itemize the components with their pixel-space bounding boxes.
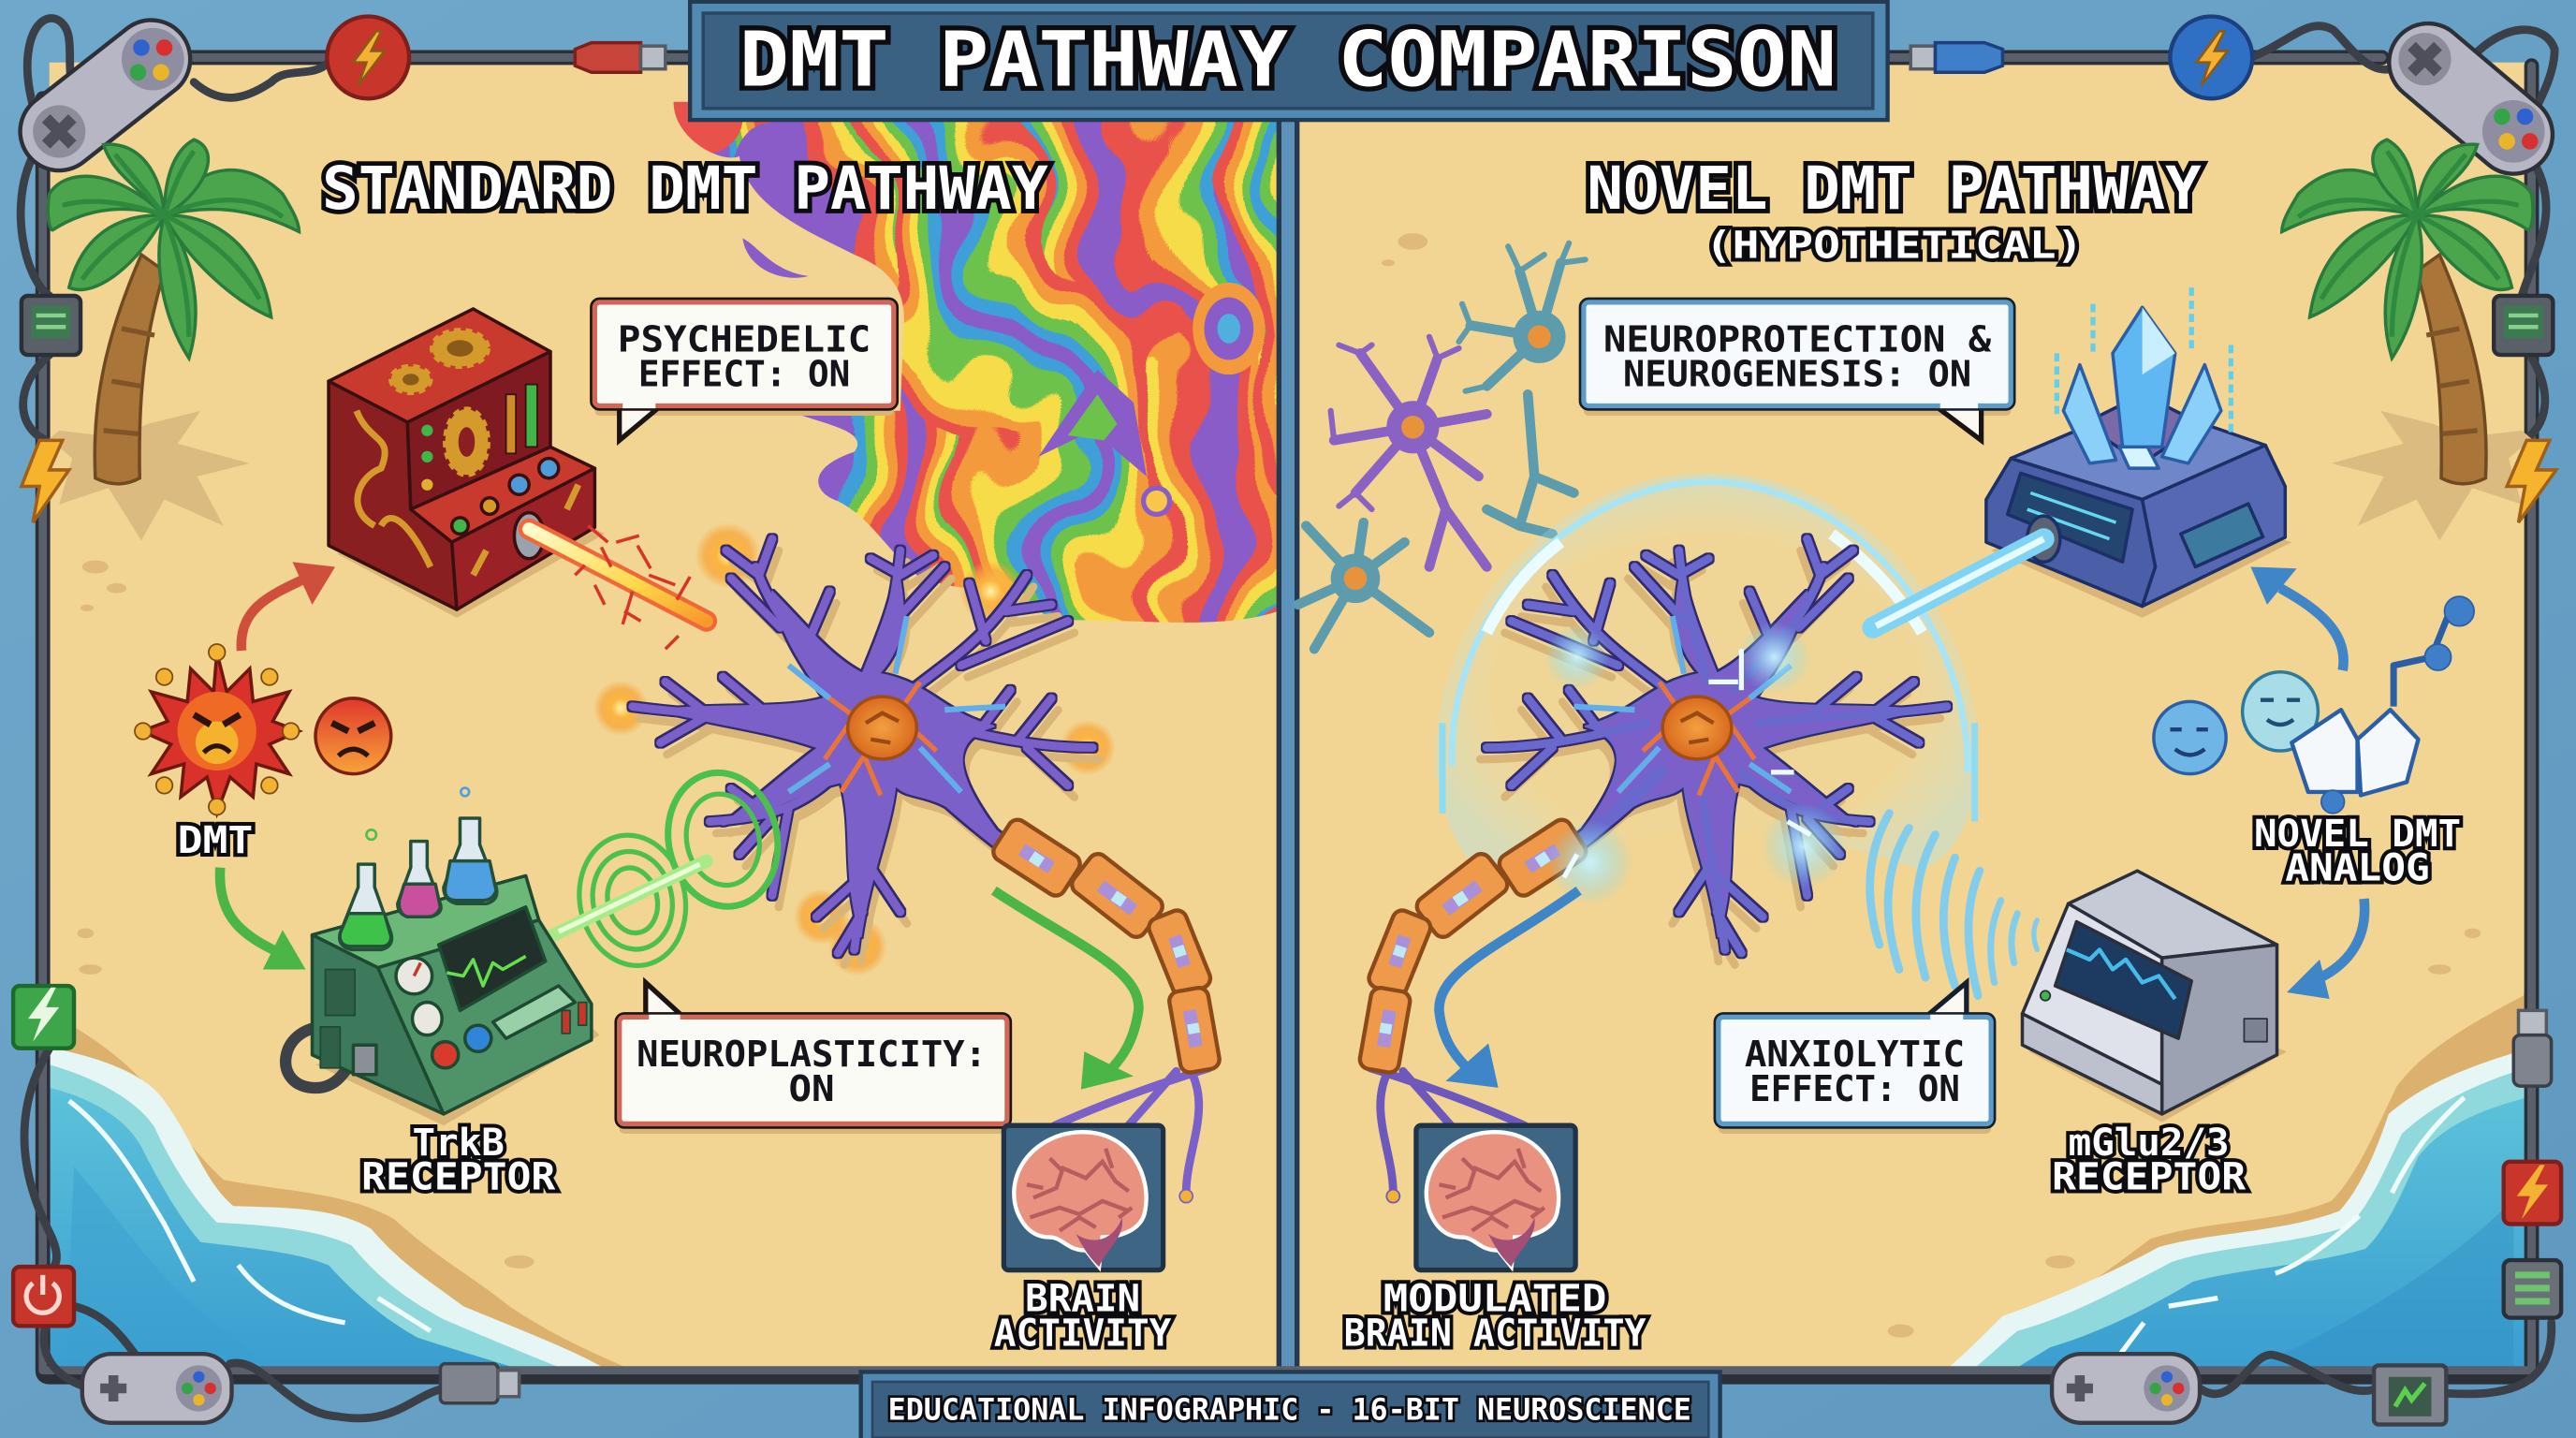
palm tree right — [2282, 139, 2533, 540]
heading: novel pathway: NOVEL DMT PATHWAY — [1587, 154, 2202, 223]
label: modulated brain activity: BRAIN ACTIVITY — [1344, 1311, 1647, 1355]
icon: red power bolt — [327, 17, 409, 98]
protective shield dome — [1436, 473, 1978, 871]
label: brain activity: BRAIN — [1025, 1277, 1140, 1321]
psychedelic rainbow swirl — [674, 101, 1277, 623]
callout: anxiolytic — [1719, 983, 1991, 1134]
icon: lightning left — [22, 440, 69, 522]
neuron left — [593, 522, 1221, 1203]
heading: standard pathway: STANDARD DMT PATHWAY — [322, 154, 1048, 223]
grey mglu monitor — [2022, 871, 2287, 1123]
ocean bottom right — [1945, 983, 2526, 1371]
palm tree left — [48, 139, 299, 540]
icon: usb right side — [2513, 1010, 2552, 1086]
novel dmt molecule — [2291, 596, 2474, 814]
controller bottom right — [2052, 1354, 2200, 1423]
callout: psychedelic effect — [594, 302, 894, 440]
label: modulated brain activity — [1344, 1277, 1647, 1355]
callout: neuroprotection: NEUROGENESIS: ON — [1623, 353, 1971, 395]
sand speckles — [78, 233, 2481, 1338]
subheading: hypothetical: (HYPOTHETICAL) — [1705, 224, 2083, 268]
callout: psychedelic effect: PSYCHEDELIC — [618, 319, 871, 361]
controller top left — [33, 28, 184, 157]
neuron right — [1358, 539, 1947, 1203]
arrow: red DMT to machine — [242, 562, 335, 651]
icon: blue usb plug — [1910, 43, 2002, 72]
arrow: green DMT to TrkB — [220, 868, 305, 969]
brain box left — [1003, 1125, 1164, 1270]
callout: neuroplasticity: ON — [788, 1068, 835, 1110]
label: brain activity: ACTIVITY — [994, 1311, 1172, 1355]
gears — [391, 330, 488, 475]
label: TrkB receptor: TrkB — [413, 1121, 505, 1165]
label: novel dmt analog: ANALOG — [2285, 846, 2430, 890]
icon: usb bottom — [440, 1364, 520, 1403]
footer banner — [861, 1372, 1720, 1438]
brain box right — [1416, 1125, 1575, 1270]
label: DMT: DMT — [178, 818, 253, 862]
arrow: blue to brain — [1439, 890, 1579, 1088]
callout: neuroprotection: NEUROPROTECTION & — [1603, 319, 1992, 361]
dmt virus — [135, 644, 299, 814]
callout: psychedelic effect: EFFECT: ON — [638, 353, 850, 395]
crystal machine — [1986, 287, 2291, 618]
title banner — [690, 2, 1888, 120]
teal smiling face — [2243, 672, 2318, 751]
label: mGlu2/3 receptor: mGlu2/3 — [2069, 1121, 2230, 1165]
synapse glows — [593, 522, 1116, 976]
label: brain activity — [994, 1277, 1172, 1355]
icon: green power button — [13, 986, 74, 1049]
crystal cluster — [2083, 394, 2202, 463]
callout: neuroplasticity: NEUROPLASTICITY: — [637, 1034, 987, 1076]
icon: green chip right — [2504, 1260, 2561, 1318]
callout: anxiolytic: ANXIOLYTIC — [1745, 1034, 1965, 1076]
red psychedelic machine — [329, 309, 605, 618]
label: mGlu2/3 receptor — [2052, 1121, 2247, 1199]
small neuron teal top — [1459, 243, 1586, 534]
icon: lightning right — [2507, 440, 2556, 522]
flasks — [340, 818, 497, 949]
small neuron purple — [1331, 337, 1486, 566]
yellow beam — [529, 526, 707, 649]
blue beam — [1873, 539, 2043, 627]
icon: red power button — [13, 1267, 74, 1326]
sound waves — [1870, 814, 2037, 996]
callout: neuroprotection — [1584, 302, 2011, 440]
label: TrkB receptor: RECEPTOR — [361, 1155, 556, 1199]
green resonance rings — [550, 762, 790, 976]
label: modulated brain activity: MODULATED — [1383, 1277, 1606, 1321]
icon: red bolt button right — [2504, 1162, 2561, 1224]
blue smiling face — [2154, 701, 2226, 774]
label: novel dmt analog — [2254, 812, 2461, 890]
label: novel dmt analog: NOVEL DMT — [2254, 812, 2461, 856]
ocean bottom left — [50, 1019, 633, 1371]
label: mGlu2/3 receptor: RECEPTOR — [2052, 1155, 2247, 1199]
title: DMT PATHWAY COMPARISON — [739, 16, 1837, 104]
small neuron teal low — [1298, 522, 1429, 649]
stray rainbow fleck — [742, 238, 809, 278]
centre divider — [1277, 115, 1299, 1373]
icon: monitor chip bottom — [2374, 1365, 2446, 1425]
angry face — [315, 698, 391, 774]
footer text: EDUCATIONAL INFOGRAPHIC - 16-BIT NEUROSCIENCE — [888, 1393, 1691, 1427]
green trkb machine — [285, 788, 600, 1125]
controller top right — [2398, 33, 2545, 163]
controller bottom left — [82, 1354, 232, 1423]
callout: anxiolytic: EFFECT: ON — [1749, 1068, 1960, 1110]
icon: red usb plug — [575, 43, 666, 72]
icon: chip left — [22, 296, 80, 355]
arrow: green to brain — [994, 890, 1138, 1090]
callout: neuroplasticity — [620, 983, 1007, 1134]
arrow: blue analog to mGlu — [2287, 899, 2364, 999]
label: TrkB receptor — [361, 1121, 556, 1199]
icon: blue power bolt — [2170, 17, 2252, 98]
arrow: blue analog to crystal machine — [2250, 566, 2344, 670]
icon: chip right — [2494, 296, 2553, 355]
